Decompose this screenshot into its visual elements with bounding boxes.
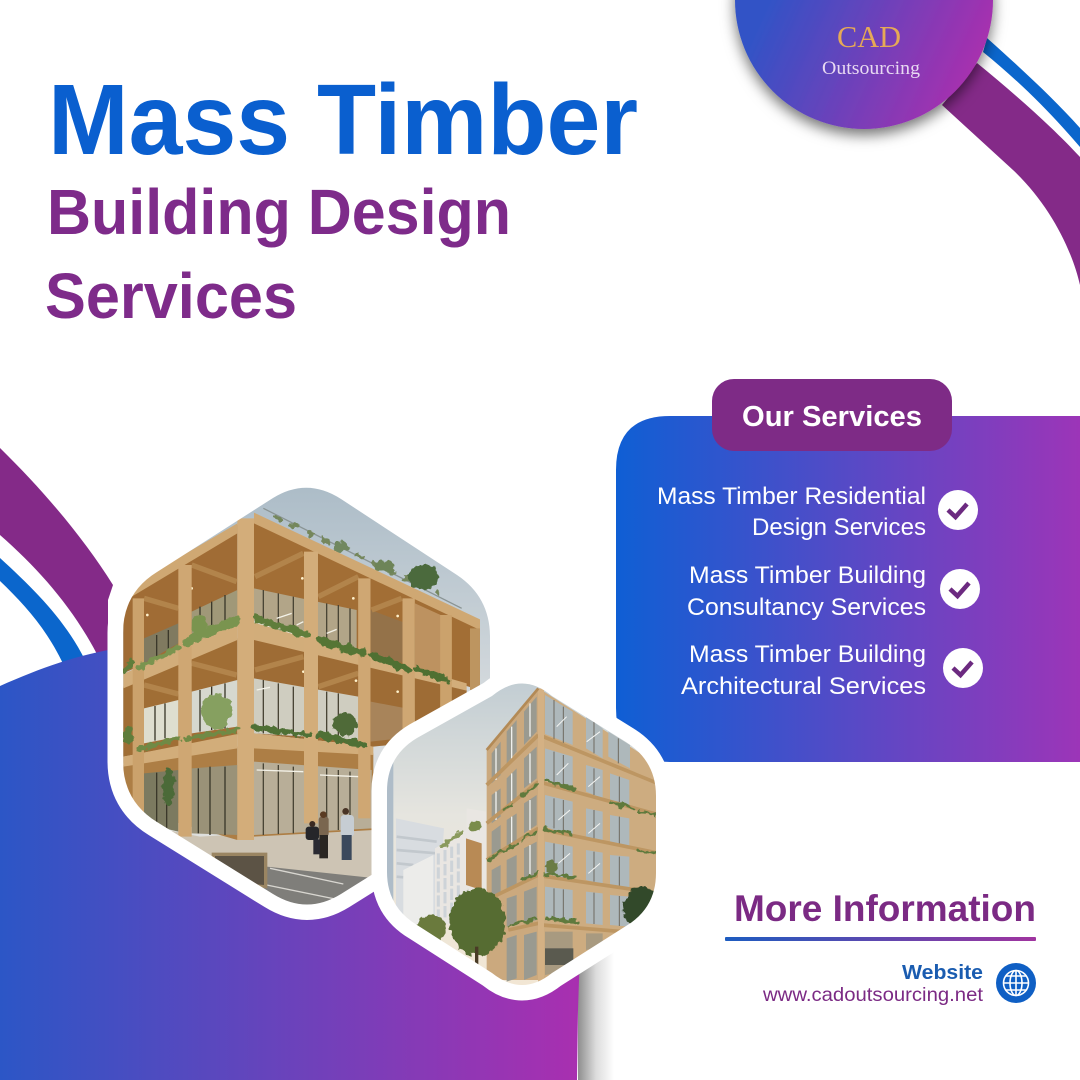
people [306, 808, 354, 860]
service item 3: Mass Timber Building [689, 641, 926, 668]
shadow beside blob [578, 930, 616, 1080]
corner column [538, 688, 544, 982]
more information block [725, 888, 1036, 1006]
decorative arcs: left [0, 448, 113, 670]
services heading pill: Our Services [742, 401, 922, 433]
ground [172, 830, 372, 878]
heading underline [725, 937, 1036, 941]
left face windows [492, 697, 537, 982]
lobby [545, 948, 573, 965]
service item 2: Mass Timber Building [689, 562, 926, 589]
service item 1: Design Services [752, 514, 926, 541]
logo circle [735, 0, 993, 129]
service item 2: Consultancy Services [687, 594, 926, 621]
background buildings [387, 762, 394, 900]
website label: Website [902, 962, 983, 984]
hexagon photo: timber tower [372, 678, 664, 1000]
beams and slabs [254, 513, 480, 630]
left face ceilings [123, 525, 237, 673]
ceiling cross beams [144, 553, 402, 694]
left face beams [487, 735, 538, 930]
service item 1: Mass Timber Residential [657, 483, 926, 510]
tower right face [544, 692, 656, 982]
services heading pill [712, 379, 952, 451]
roof plants and railing [263, 508, 462, 608]
planters and street trees [414, 782, 660, 955]
right face ceilings [254, 517, 480, 690]
subtitle line 2: Services [45, 260, 297, 332]
right face beams [542, 736, 656, 932]
ceiling lights [146, 577, 399, 693]
title [45, 64, 638, 332]
right face windows [545, 695, 630, 927]
service item 3: Architectural Services [681, 673, 926, 700]
title: Mass Timber [48, 64, 638, 176]
website url: www.cadoutsourcing.net [762, 984, 984, 1006]
right face windows [254, 588, 357, 652]
gradient blob: bottom left [0, 648, 580, 1080]
more information heading: More Information [734, 888, 1036, 929]
logo text: Outsourcing: Outsourcing [822, 58, 921, 79]
logo text: CAD: CAD [837, 19, 901, 54]
icon: globe [996, 963, 1036, 1003]
service item 1 [657, 483, 978, 541]
left face windows [192, 590, 237, 634]
service item 2 [687, 562, 980, 621]
hexagon photo: timber building [108, 488, 490, 920]
decorative arcs: top right [942, 38, 1080, 285]
columns [237, 518, 254, 840]
services panel [616, 379, 1080, 762]
subtitle line 1: Building Design [47, 176, 511, 248]
tower left face [487, 688, 538, 980]
service item 3 [681, 641, 983, 700]
balcony plants [123, 616, 447, 805]
